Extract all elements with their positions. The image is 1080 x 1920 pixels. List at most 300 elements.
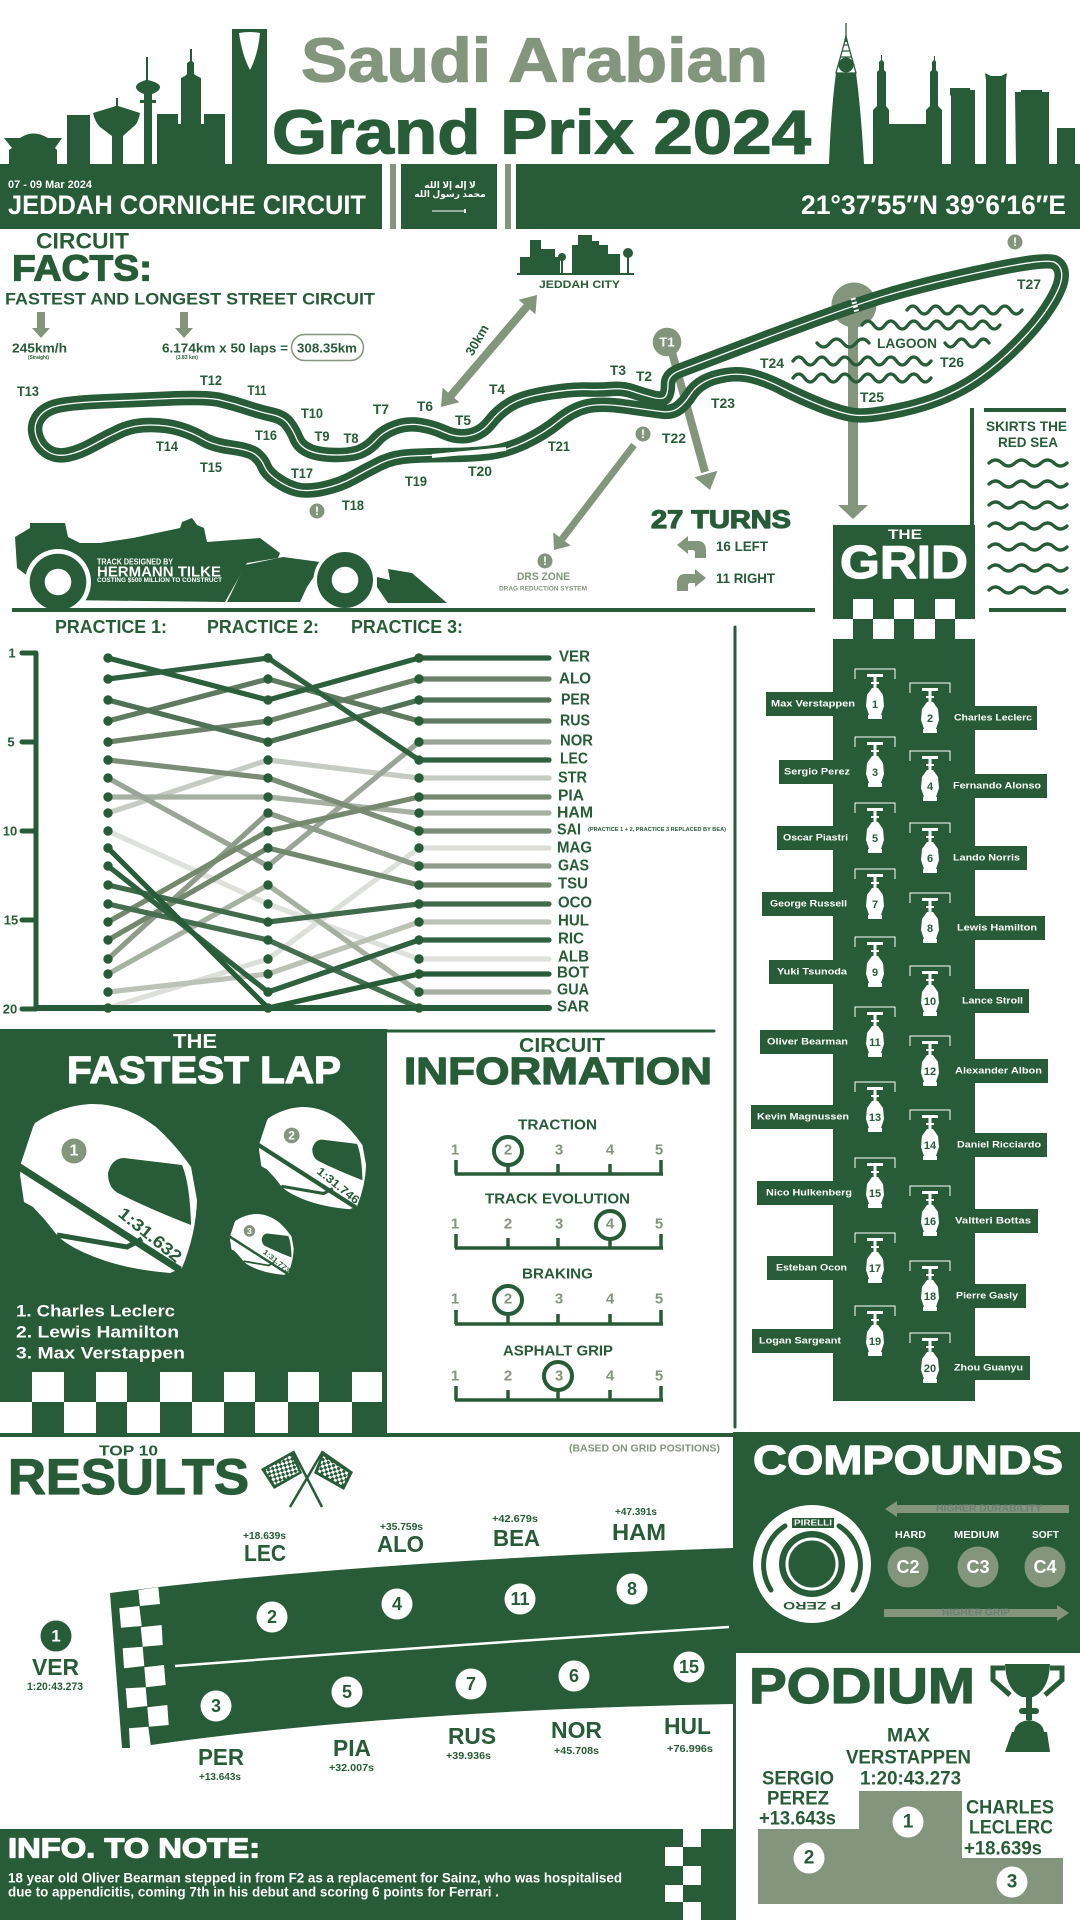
third place name: LECLERC [969,1818,1053,1838]
turn labels: T18 [342,497,364,513]
title [272,26,812,168]
turn labels: T12 [200,372,222,388]
p3 per: 3 [211,1696,221,1716]
axis: 1 [8,646,16,660]
second place name [759,1768,836,1830]
podium steps [758,1791,1063,1904]
driver 5 [777,803,895,853]
helmet 1: 1 [70,1142,79,1160]
p8 ham: +47.391s [615,1506,657,1518]
scale: track evolution: 1 [451,1216,459,1232]
icon: trophy [993,1664,1062,1752]
panel: skirts the red sea: SKIRTS THE [986,418,1067,434]
driver 16 [910,1186,1038,1236]
icon: chequered flags [261,1451,353,1507]
driver 9: 9 [872,967,878,979]
practice headings: PRACTICE 1: [55,617,167,637]
27 turns: 16 LEFT [716,538,768,554]
fastest lap ranking [16,1302,185,1362]
top speed [12,340,67,361]
icon: tyre: P ZERO [782,1599,841,1611]
driver 19: 19 [869,1336,881,1348]
driver 8: 8 [927,923,933,935]
driver codes: GAS [558,858,589,874]
turn labels: T27 [1017,276,1041,292]
second place name: PEREZ [767,1788,829,1810]
driver 14: Daniel Ricciardo [957,1140,1041,1150]
driver codes: TSU [558,876,588,892]
27 turns: 27 TURNS [651,506,791,534]
scale: track evolution: TRACK EVOLUTION [485,1190,630,1208]
p5 pia: 5 [342,1682,352,1702]
chart: track map [35,261,1062,491]
icon: f1 car with designer text: HERMANN TILKE [97,564,221,580]
helmet 3 [229,1214,294,1275]
compound labels and circles [888,1529,1066,1588]
driver codes: HUL [558,912,589,930]
scale: traction: 5 [655,1142,663,1158]
driver 19 [752,1306,895,1356]
icon: f1 car with designer text [15,518,447,615]
fastest lap heading: THE [173,1031,217,1053]
top speed: (Straight) [28,355,49,361]
panel: circuit information [404,1035,712,1400]
third place name [964,1798,1054,1860]
label: jeddah city: JEDDAH CITY [539,279,621,291]
driver codes: MAG [557,840,592,856]
panel: fastest lap [0,1029,387,1434]
arrow: start line to the grid [832,282,876,519]
driver 8: Lewis Hamilton [957,922,1037,934]
axis: 10 [3,824,17,838]
icon: jeddah city skyline [517,235,634,275]
icon: tyre [753,1505,871,1623]
driver 2: Charles Leclerc [954,712,1032,724]
scale: braking [451,1266,663,1324]
podium steps: 1 [903,1812,914,1832]
driver codes: RUS [560,712,590,730]
scale: asphalt grip: 5 [655,1368,663,1384]
icon: f1 car with designer text: COSTING $500 MILLION TO CONSTRUCT [97,578,222,584]
turn labels: T14 [156,438,178,454]
helmet 2: 2 [288,1128,295,1142]
divider lines [380,627,735,1427]
driver 11: Oliver Bearman [767,1036,848,1048]
driver 14: 14 [924,1140,937,1152]
practice headings: PRACTICE 3: [351,617,463,637]
scale: asphalt grip: ASPHALT GRIP [503,1342,613,1360]
driver 7: George Russell [770,898,847,910]
driver 17 [767,1233,895,1283]
turn labels: T26 [940,354,964,370]
circuit facts heading: FASTEST AND LONGEST STREET CIRCUIT [5,290,376,308]
turn labels: T13 [17,383,39,399]
podium steps: 3 [1007,1872,1017,1892]
fastest lap ranking: 1. Charles Leclerc [16,1302,175,1320]
results heading: RESULTS [8,1449,249,1505]
p3 per [198,1690,244,1783]
p6 nor: NOR [551,1717,602,1743]
driver 12: 12 [924,1066,936,1078]
driver 4: Fernando Alonso [953,780,1041,792]
driver 13: 13 [869,1112,881,1124]
p2 lec: LEC [244,1540,286,1566]
checker [833,599,975,639]
compound labels and circles: MEDIUM [954,1529,999,1541]
panel: circuit information: INFORMATION [404,1051,712,1093]
axis: 20 [3,1002,17,1016]
scale: traction: 4 [606,1142,615,1158]
p4 alo: +35.759s [380,1521,423,1533]
compound labels and circles: SOFT [1032,1529,1060,1541]
scale: traction: 1 [451,1142,459,1158]
turn labels: T9 [314,428,330,444]
circuit information heading: CIRCUIT [519,1035,605,1057]
p6 nor [551,1660,602,1757]
p11 bea: BEA [493,1525,540,1551]
turn labels: T19 [405,473,427,489]
driver 13: Kevin Magnussen [757,1112,849,1122]
driver 1 [766,669,895,719]
arrow: turn 1 to turn count [653,328,718,490]
p4 alo: ALO [377,1531,424,1557]
scale: asphalt grip: 1 [451,1368,459,1384]
driver 20 [910,1333,1030,1383]
top speed: 245km/h [12,340,67,356]
scale: traction [451,1116,663,1174]
turn labels: T25 [860,389,884,405]
turn labels: T11 [248,382,267,398]
sainz note: (PRACTICE 1 + 2, PRACTICE 3 REPLACED BY BEA) [588,827,726,833]
driver codes: SAI [557,822,581,838]
icon: saudi flag [401,164,497,229]
driver 5: Oscar Piastri [783,832,848,844]
podium steps: 2 [804,1848,814,1868]
27 turns [651,506,791,591]
scale: traction: 2 [504,1142,512,1158]
p7 rus: +39.936s [446,1750,491,1762]
helmet 1 [18,1104,197,1273]
warning markers: ! [315,504,319,518]
title: Saudi Arabian [301,26,768,96]
checker [0,1372,382,1433]
panel: info to note [0,1829,736,1920]
scale: braking: 4 [606,1290,615,1308]
grid heading: THE [888,526,922,542]
arrow: higher grip [884,1605,1069,1621]
driver 18: 18 [924,1291,936,1303]
scale: asphalt grip: 2 [504,1368,512,1384]
panel: skirts the red sea: RED SEA [998,434,1058,450]
compound labels and circles: C4 [1033,1557,1057,1577]
driver codes: GUA [557,982,589,998]
driver codes: HAM [557,804,593,822]
icon: left arrow [677,536,706,558]
info heading: INFO. TO NOTE: [8,1832,260,1864]
scale: asphalt grip: 3 [555,1368,563,1384]
driver 11 [760,1007,895,1057]
third place name: +18.639s [964,1838,1042,1860]
compound labels and circles: C3 [966,1557,990,1577]
turn labels: T16 [255,427,277,443]
driver 5: 5 [872,833,878,845]
circuit facts heading: CIRCUIT [36,228,130,254]
compound labels and circles: C2 [896,1557,920,1577]
driver 3: 3 [872,767,878,779]
arrow: drs zone [553,445,634,550]
first place name: MAX [887,1726,930,1746]
scale: track evolution: 4 [606,1216,615,1232]
p8 ham: 8 [627,1579,637,1599]
p5 pia: +32.007s [329,1762,374,1774]
p4 alo [377,1521,424,1620]
driver 17: 17 [869,1263,881,1275]
driver 19: Logan Sargeant [759,1336,842,1346]
driver 15: Nico Hulkenberg [766,1188,852,1198]
driver codes: VER [559,648,590,666]
skyline right [829,23,1075,164]
p6 nor: 6 [569,1666,579,1686]
results note: (BASED ON GRID POSITIONS) [569,1444,720,1454]
chequered start strip [119,1587,169,1748]
scale: braking: 1 [451,1290,459,1308]
p4 alo: 4 [392,1594,402,1614]
centre line [175,1627,729,1666]
practice headings [55,617,463,637]
arrow: turn 1 to turn count: T1 [659,334,675,350]
position dots [108,658,419,1008]
driver codes: STR [558,770,587,786]
turn labels: T17 [291,465,313,481]
scale: traction: TRACTION [518,1116,597,1134]
driver codes: ALB [558,948,589,966]
driver 8 [910,893,1045,943]
driver 7 [762,869,895,919]
base line [36,1005,549,1011]
p11 bea: +42.679s [492,1513,538,1525]
turn labels: T23 [711,395,735,411]
scale: braking: 3 [555,1290,563,1308]
scale: braking: 5 [655,1290,663,1308]
driver 2 [910,683,1037,733]
driver 16: Valtteri Bottas [955,1216,1031,1226]
p11 bea [492,1513,540,1614]
axis: 15 [4,912,18,928]
turn labels: T24 [760,355,784,371]
first place name: VERSTAPPEN [846,1748,971,1768]
divider line [12,608,815,612]
chart: practice positions [3,646,726,1016]
panel: podium [749,1658,1063,1904]
driver codes: OCO [558,894,592,912]
helmet 2 [258,1107,366,1209]
turn labels: T15 [200,459,222,475]
fastest lap ranking: 3. Max Verstappen [16,1344,185,1362]
helmet 1: 1:31.632 [114,1204,186,1266]
turn labels: T10 [301,405,323,421]
turn labels: T21 [548,438,570,454]
driver 14 [910,1110,1047,1160]
driver codes [557,648,593,1016]
race distance: 308.35km [297,340,357,356]
label: drs zone [499,571,587,592]
p2 lec: 2 [267,1607,277,1627]
compounds heading: COMPOUNDS [753,1437,1063,1483]
driver codes: PER [561,692,590,708]
driver codes: RIC [558,930,584,948]
header bar [0,164,1080,229]
info body: 18 year old Oliver Bearman stepped in from F2 as a replacement for Sainz, who was hospitalised [8,1870,622,1886]
lagoon label: LAGOON [877,335,937,351]
p15 hul: 15 [679,1657,699,1677]
p11 bea: 11 [510,1589,530,1609]
label: drs zone: DRS ZONE [517,571,570,583]
icon: tyre: PIRELLI [794,1518,832,1528]
arrow: 30km to city [441,295,537,407]
helmet 3: 3 [247,1226,252,1236]
icon: right arrow [677,569,706,591]
driver 13 [751,1082,895,1132]
first place name [846,1726,971,1790]
panel: info to note: due to appendicitis, coming 7th in his debut and scoring 6 points for Ferrari . [8,1884,499,1900]
warning markers: ! [543,554,547,568]
driver 3 [779,737,895,787]
driver 6: 6 [927,853,933,865]
turn labels: T5 [455,412,471,428]
p15 hul: +76.996s [667,1743,713,1755]
second place name: SERGIO [762,1768,834,1790]
driver 2: 2 [927,713,933,725]
p3 per: PER [198,1744,244,1770]
turn labels: T6 [417,398,433,414]
winner: 1 [51,1626,61,1646]
turn labels: T4 [489,381,505,397]
driver 1: Max Verstappen [771,698,855,710]
turn labels: T2 [636,368,652,384]
p5 pia: PIA [333,1735,371,1761]
skyline left [4,29,267,164]
p2 lec [243,1530,288,1632]
lagoon waves and label [793,306,1022,382]
driver codes: BOT [557,964,589,982]
turn labels [17,276,1041,513]
results heading: TOP 10 [99,1442,158,1460]
race distance: 6.174km x 50 laps = [162,340,288,356]
race date: 07 - 09 Mar 2024 [8,179,93,191]
p7 rus [446,1668,496,1762]
winner: VER [32,1654,79,1680]
driver codes: PIA [558,788,584,804]
arrow: higher durability [885,1501,1069,1517]
driver codes: LEC [560,750,588,768]
scale: braking: 2 [504,1290,512,1308]
scale: traction: 3 [555,1142,563,1158]
driver 1: 1 [872,699,878,711]
second place name: +13.643s [759,1808,836,1830]
scale: braking: BRAKING [522,1266,593,1282]
driver 11: 11 [869,1037,881,1049]
warning markers: ! [1013,235,1017,249]
driver 18: Pierre Gasly [956,1290,1019,1302]
circuit facts heading [5,228,376,308]
panel: skirts the red sea [970,408,1067,612]
driver 10: Lance Stroll [962,996,1023,1006]
driver 20: Zhou Guanyu [954,1362,1023,1374]
panel: compounds [733,1432,1080,1653]
arrow: 30km to city: 30km [462,322,492,358]
p15 hul: HUL [664,1713,711,1739]
driver 17: Esteban Ocon [776,1262,847,1274]
driver 9 [769,937,895,987]
p6 nor: +45.708s [554,1745,599,1757]
driver 15 [757,1158,895,1208]
p15 hul [664,1652,713,1755]
race distance [162,334,364,361]
winner [27,1620,83,1693]
driver 12 [910,1036,1048,1086]
helmet 2: 1:31.746 [314,1166,361,1207]
title: Grand Prix 2024 [272,98,812,168]
icon: saudi flag: لا إله إلا الله [424,180,476,190]
winner: 1:20:43.273 [27,1681,83,1693]
driver 4: 4 [927,781,934,793]
driver 12: Alexander Albon [955,1066,1042,1076]
27 turns: 11 RIGHT [716,570,775,586]
scale: track evolution: 2 [504,1216,512,1232]
axis [3,646,36,1016]
panel: the grid [751,525,1048,1401]
p7 rus: 7 [466,1674,476,1694]
scale: track evolution [451,1190,663,1248]
driver 10: 10 [924,996,936,1008]
chart: results track [27,1506,733,1783]
arrow: higher grip: HIGHER GRIP [942,1608,1010,1618]
driver codes: SAR [557,998,589,1016]
turn labels: T20 [468,463,492,479]
driver 18 [910,1261,1026,1311]
icon: down arrows [32,312,193,338]
scale: asphalt grip [451,1342,663,1400]
driver 7: 7 [872,899,878,911]
driver 15: 15 [869,1188,881,1200]
driver 3: Sergio Perez [784,766,850,778]
checker [665,1829,701,1920]
arrow: higher durability: HIGHER DURABILITY [936,1504,1042,1514]
circuit facts heading: FACTS: [12,248,152,288]
scale: track evolution: 5 [655,1216,663,1232]
turn labels: T7 [373,401,389,417]
p5 pia [329,1676,374,1774]
driver 20: 20 [924,1363,936,1375]
turn labels: T8 [344,430,359,446]
driver 10 [910,966,1029,1016]
fastest lap ranking: 2. Lewis Hamilton [16,1322,179,1342]
scale: asphalt grip: 4 [606,1368,615,1384]
practice headings: PRACTICE 2: [207,617,319,637]
circuit name: JEDDAH CORNICHE CIRCUIT [8,190,366,220]
driver codes: ALO [559,670,591,688]
label: drs zone: DRAG REDUCTION SYSTEM [499,586,587,592]
warning markers [310,234,1022,568]
panel: fastest lap: FASTEST LAP [67,1050,341,1092]
turn labels: T22 [662,430,686,446]
designer text: TRACK DESIGNED BY [97,558,174,566]
helmet 3: 1:31.773 [261,1247,292,1275]
turn labels: T3 [610,362,626,378]
driver 16: 16 [924,1216,936,1228]
position lines [108,658,549,1008]
driver codes: NOR [560,732,593,750]
